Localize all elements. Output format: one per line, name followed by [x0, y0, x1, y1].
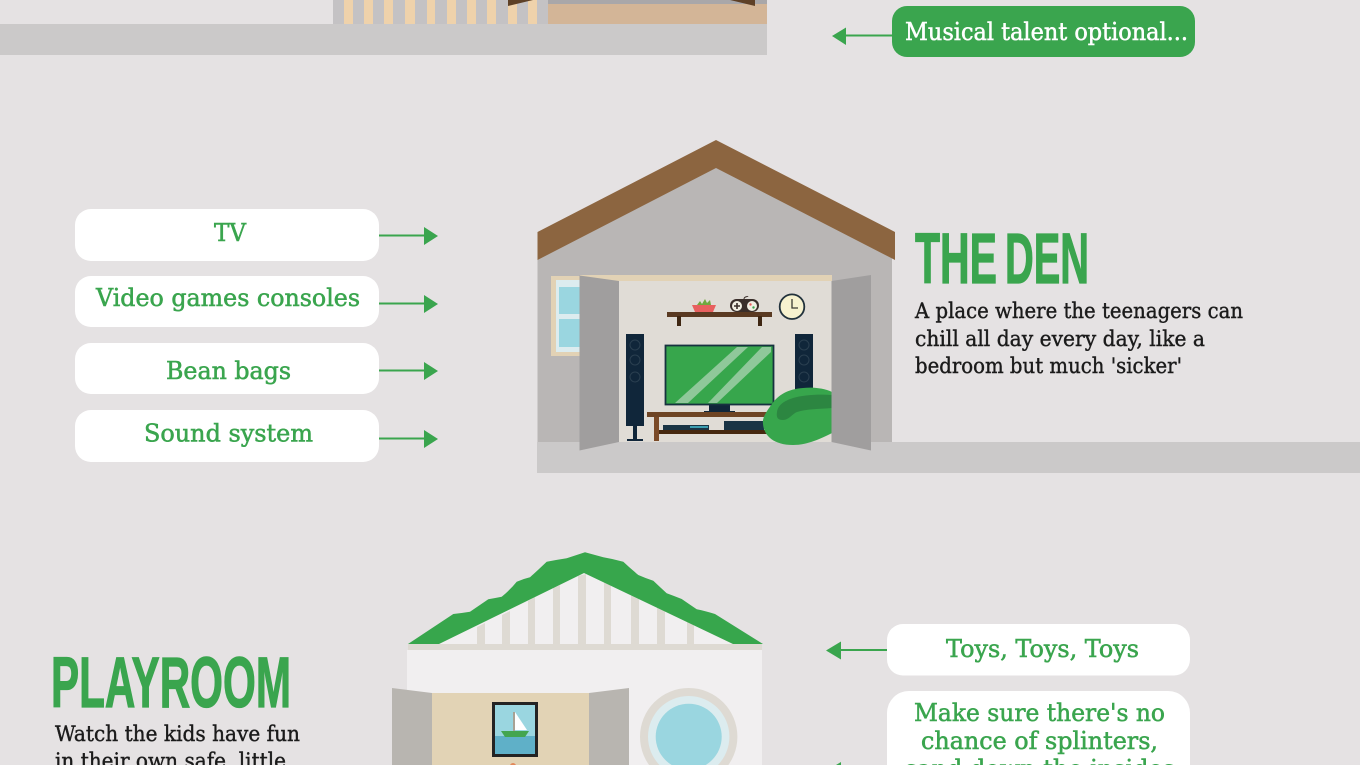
house wall: [538, 158, 892, 442]
speakers: [626, 334, 813, 441]
right door: [589, 688, 629, 765]
item: toys: [826, 624, 1190, 676]
interior: [432, 693, 589, 765]
item: sound system: Sound system: [144, 420, 313, 448]
text block: playroom: [51, 644, 300, 765]
item: toys: Toys, Toys, Toys: [946, 635, 1139, 663]
television: [666, 346, 774, 413]
panel: playroom item list: [826, 624, 1190, 765]
interior wall: [580, 275, 832, 281]
callout: musical talent optional: [832, 6, 1195, 57]
heading: the den: DEN: [1005, 220, 1089, 299]
heading: playroom: PLAYROOM: [51, 644, 291, 723]
roof: [538, 140, 895, 260]
item: TV: TV: [214, 219, 247, 247]
item: bean bags: [75, 343, 438, 394]
clock: [780, 294, 804, 319]
description: [914, 299, 1243, 378]
description: [55, 722, 300, 765]
item: video games consoles: [75, 276, 438, 327]
toy top: [510, 763, 516, 765]
item: TV: [75, 209, 438, 261]
house: the den: [537, 140, 1360, 473]
text block: the den: [914, 220, 1243, 378]
window: [551, 276, 581, 356]
item: splinters: [826, 691, 1190, 765]
right door: [832, 275, 871, 450]
house: music room (bottom of previous section): [0, 0, 767, 55]
callout: musical talent optional: Musical talent optional...: [905, 18, 1188, 46]
description: bedroom but much 'sicker': [915, 354, 1182, 378]
scalloped roof: [408, 552, 763, 644]
description: A place where the teenagers can: [914, 299, 1243, 323]
item: splinters: Make sure there's no: [914, 699, 1165, 727]
gable: [439, 573, 733, 644]
tv stand: [647, 412, 770, 441]
panel: the den item list: [75, 209, 438, 462]
beam: [408, 644, 762, 650]
framed picture of a boat: [492, 702, 538, 757]
left door: [392, 688, 432, 765]
item: bean bags: Bean bags: [166, 357, 291, 385]
heading: the den: THE: [915, 220, 997, 299]
house: playroom: [392, 552, 763, 765]
description: chill all day every day, like a: [915, 327, 1205, 351]
item: sound system: [75, 410, 438, 462]
item: splinters: chance of splinters,: [921, 727, 1158, 755]
shelf with bowl and controller: [667, 296, 772, 326]
ground strip: [537, 442, 1360, 473]
round window: [640, 688, 737, 765]
description: Watch the kids have fun: [55, 722, 300, 746]
item: video games consoles: Video games consoles: [95, 284, 360, 312]
wall: [407, 650, 762, 765]
bean bag: [763, 388, 832, 445]
left door: [580, 276, 619, 450]
gable studs: [477, 574, 694, 644]
